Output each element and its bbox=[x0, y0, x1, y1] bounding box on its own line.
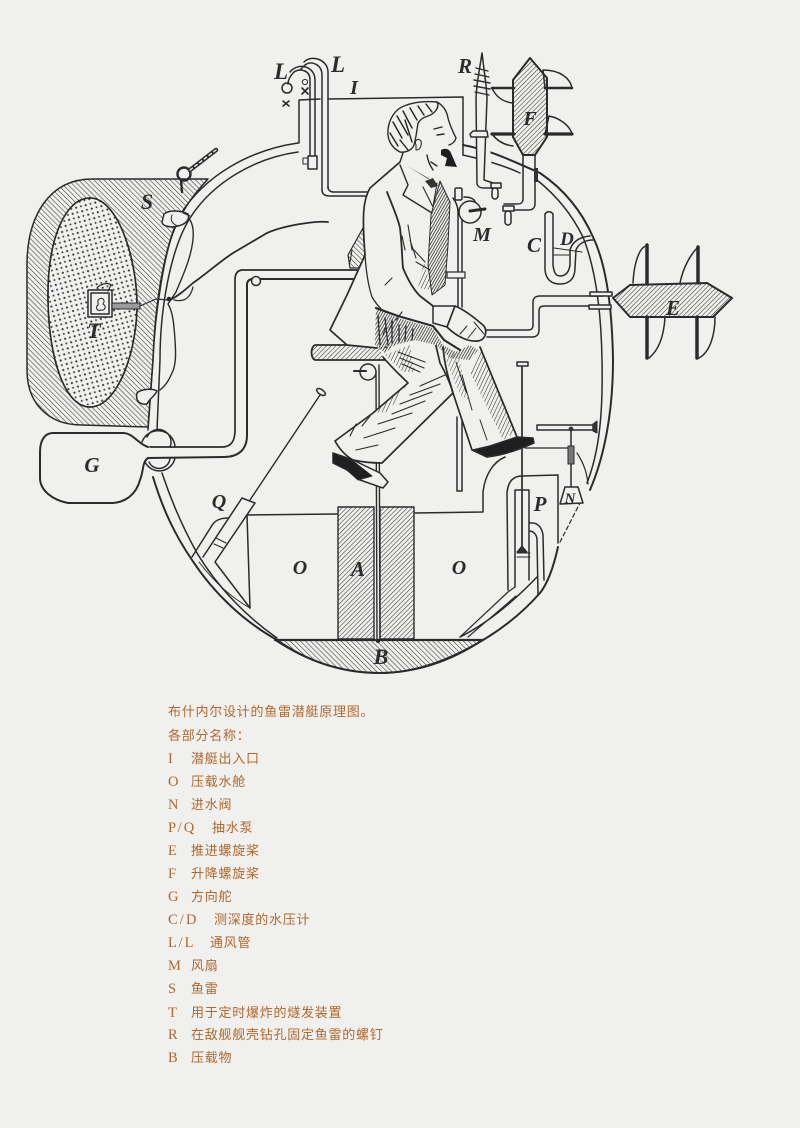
letter labels: E bbox=[665, 296, 680, 320]
hand bbox=[447, 306, 486, 341]
seat back bbox=[348, 228, 366, 268]
waistcoat bbox=[428, 181, 450, 295]
letter labels: P bbox=[533, 492, 547, 516]
item G bbox=[168, 889, 232, 905]
item B: B bbox=[168, 1050, 178, 1066]
trousers bbox=[335, 333, 517, 463]
hull wall bbox=[148, 143, 613, 673]
screw R bbox=[470, 53, 501, 199]
pump P bbox=[460, 362, 558, 637]
item E: E bbox=[168, 843, 177, 859]
item I: I bbox=[168, 751, 173, 767]
item G: 方向舵 bbox=[191, 889, 232, 904]
item R: R bbox=[168, 1027, 178, 1043]
letter labels: O bbox=[452, 557, 466, 579]
ballast B bbox=[275, 639, 483, 673]
letter labels: D bbox=[559, 229, 574, 250]
letter labels: R bbox=[457, 54, 472, 78]
letter labels: S bbox=[141, 189, 153, 214]
ear bbox=[415, 139, 421, 150]
letter labels: I bbox=[349, 77, 359, 99]
wires and clips bbox=[137, 211, 328, 404]
item F: F bbox=[168, 866, 176, 882]
hair bbox=[388, 102, 438, 152]
letter labels: G bbox=[84, 453, 100, 477]
item B: 压载物 bbox=[191, 1050, 232, 1065]
ventilator fan M bbox=[447, 188, 485, 307]
letter labels: Q bbox=[212, 491, 226, 513]
item N bbox=[168, 797, 232, 813]
item E: 推进螺旋桨 bbox=[191, 843, 260, 858]
letter labels: C bbox=[527, 233, 542, 257]
caption title: 布什内尔设计的鱼雷潜艇原理图。 bbox=[168, 704, 374, 719]
rudder pivot bbox=[142, 429, 175, 471]
lifting propeller F bbox=[492, 58, 572, 225]
hatch I and ventilation tubes L bbox=[282, 58, 463, 196]
inlet valve N bbox=[525, 421, 597, 504]
item L/L: 通风管 bbox=[210, 935, 251, 950]
ballast tanks O and interior walls bbox=[247, 417, 505, 608]
caption: part names list bbox=[168, 704, 384, 1066]
item O: 压载水舱 bbox=[191, 774, 246, 789]
item M bbox=[168, 958, 219, 974]
ballast weight A bbox=[338, 365, 414, 640]
item L/L: L / L bbox=[168, 935, 193, 951]
rudder G bbox=[40, 433, 148, 503]
item I: 潜艇出入口 bbox=[191, 751, 260, 766]
letter labels: O bbox=[293, 557, 307, 579]
letter labels bbox=[84, 52, 680, 669]
item F: 升降螺旋桨 bbox=[191, 866, 260, 881]
item O bbox=[168, 774, 246, 790]
letter labels: L bbox=[330, 52, 345, 77]
item G: G bbox=[168, 889, 178, 905]
icon: screw eye and chain bbox=[178, 150, 216, 192]
item M: 风扇 bbox=[191, 958, 219, 973]
figure: seated man operating the submarine bbox=[330, 102, 534, 488]
item N: N bbox=[168, 797, 178, 813]
shoes bbox=[333, 453, 388, 488]
seat bbox=[312, 345, 386, 380]
item L/L bbox=[168, 935, 251, 951]
item S bbox=[168, 981, 219, 997]
letter labels: L bbox=[273, 59, 288, 84]
letter labels: T bbox=[87, 318, 102, 343]
item B bbox=[168, 1050, 232, 1066]
item R: 在敌舰舰壳钻孔固定鱼雷的螺钉 bbox=[191, 1027, 384, 1042]
item T: 用于定时爆炸的燧发装置 bbox=[191, 1005, 342, 1020]
pressure gauge C / D bbox=[545, 212, 593, 284]
head bbox=[400, 102, 457, 178]
icon: detonator box T bbox=[88, 284, 168, 317]
panel: torpedo S bbox=[27, 179, 208, 427]
cuff bbox=[433, 306, 455, 327]
propulsion propeller E bbox=[487, 245, 732, 358]
letter labels: A bbox=[349, 557, 365, 581]
letter labels: B bbox=[373, 644, 388, 669]
engraved cross-section diagram of the submarine bbox=[26, 52, 733, 674]
bow tie bbox=[425, 178, 438, 188]
item P/Q: 抽水泵 bbox=[212, 820, 253, 835]
list heading: 各部分名称： bbox=[168, 728, 251, 743]
item T: T bbox=[168, 1005, 177, 1021]
stippled charge bbox=[48, 198, 137, 407]
item P/Q: P / Q bbox=[168, 820, 194, 836]
letter labels: F bbox=[522, 108, 537, 130]
item C/D: C / D bbox=[168, 912, 196, 928]
item P/Q bbox=[168, 820, 253, 836]
item C/D bbox=[168, 912, 310, 928]
letter labels: N bbox=[564, 491, 577, 507]
item S: S bbox=[168, 981, 176, 997]
coat bbox=[330, 160, 455, 348]
item O: O bbox=[168, 774, 178, 790]
item N: 进水阀 bbox=[191, 797, 232, 812]
item S: 鱼雷 bbox=[191, 981, 219, 996]
letter labels: M bbox=[472, 224, 492, 246]
pump Q bbox=[192, 387, 327, 608]
item M: M bbox=[168, 958, 181, 974]
item C/D: 测深度的水压计 bbox=[214, 912, 310, 927]
steering pipe bbox=[148, 270, 357, 458]
dark shadow under the arm bbox=[375, 308, 478, 360]
beard and moustache bbox=[441, 149, 457, 167]
